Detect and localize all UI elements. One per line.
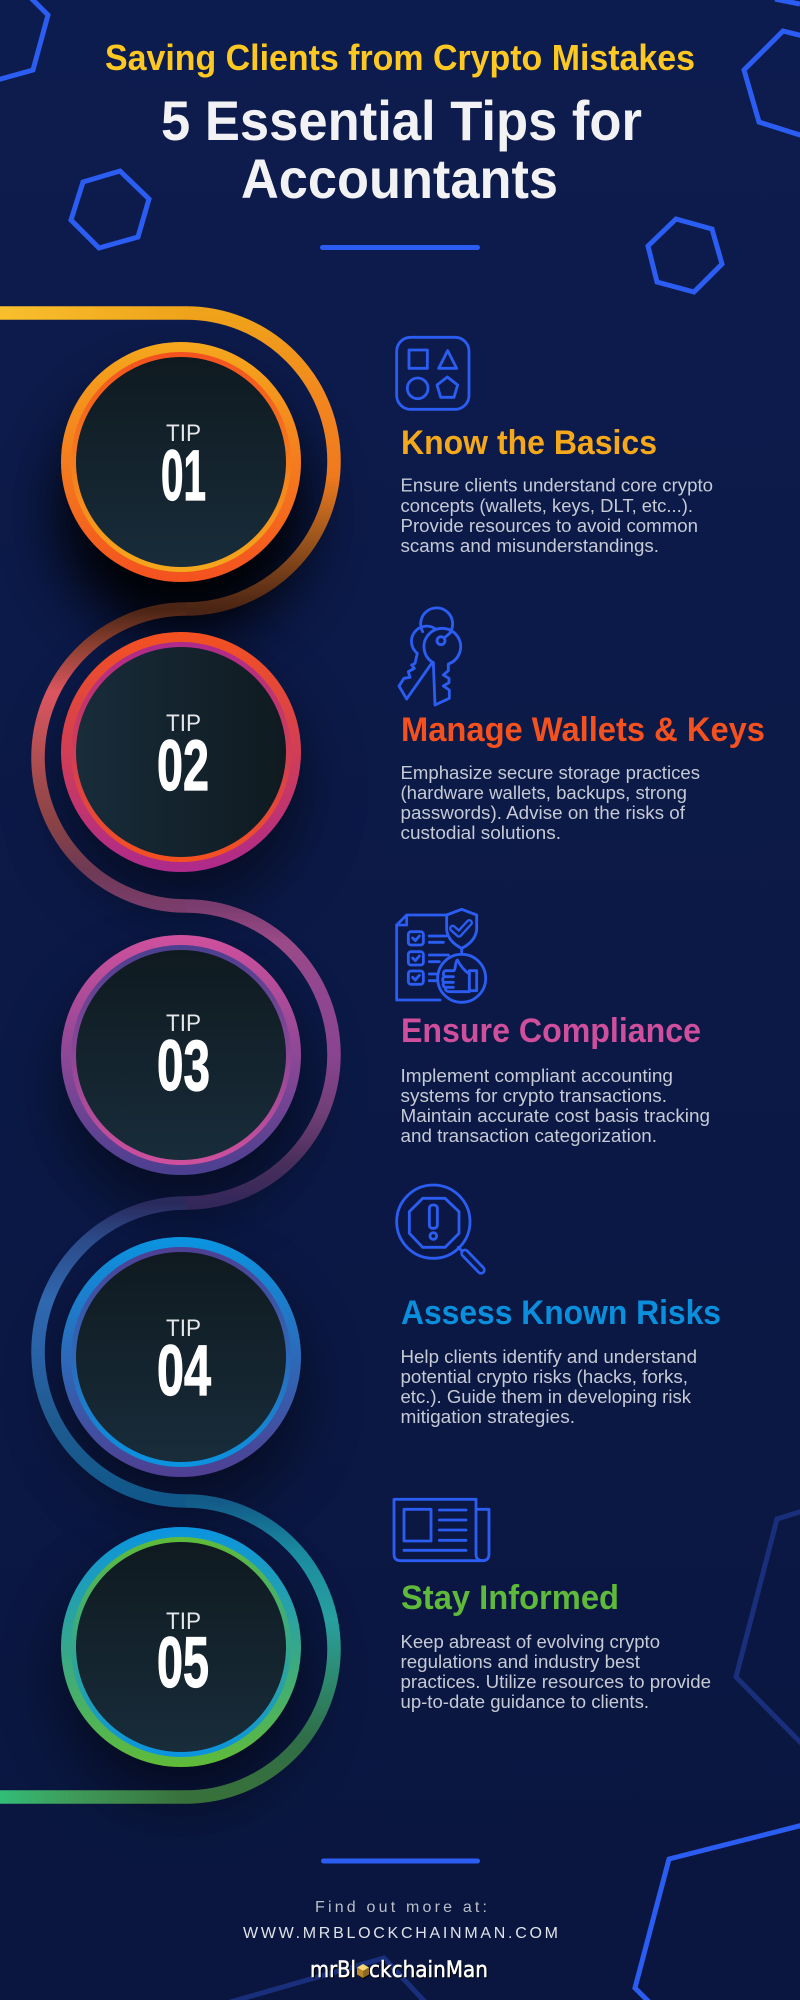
- winding gradient path: [0, 313, 334, 1797]
- icon: newspaper: [394, 1499, 489, 1561]
- text: assess known risks: potential crypto risks (hacks, forks,: [400, 1367, 688, 1387]
- header divider: [320, 245, 480, 250]
- text: know the basics: [400, 476, 713, 556]
- icon: keys: [399, 608, 461, 705]
- text: stay informed: [400, 1632, 711, 1712]
- text: manage wallets and keys: custodial solutions.: [400, 823, 561, 843]
- text: ensure compliance: systems for crypto transactions.: [400, 1086, 667, 1106]
- icon: shapes: [397, 337, 469, 409]
- text: know the basics: scams and misunderstandings.: [400, 536, 659, 556]
- tip 2 number: 02: [157, 727, 209, 806]
- text: know the basics: Provide resources to avoid common: [400, 516, 698, 536]
- tip 1 label: TIP: [166, 420, 201, 447]
- heading: ensure compliance: Ensure Compliance: [401, 1012, 701, 1050]
- text: know the basics: Ensure clients understand core crypto: [400, 476, 713, 496]
- text: manage wallets and keys: Emphasize secure storage practices: [400, 763, 700, 783]
- tip 4 badge: [61, 1237, 301, 1477]
- text: ensure compliance: Implement compliant accounting: [400, 1066, 673, 1086]
- heading: manage wallets and keys: Manage Wallets & Keys: [401, 711, 765, 749]
- tip 2 badge: [61, 632, 301, 872]
- heading: stay informed: Stay Informed: [401, 1579, 619, 1617]
- heading: know the basics: Know the Basics: [401, 424, 657, 462]
- text: manage wallets and keys: [400, 763, 700, 843]
- footer divider: [321, 1858, 480, 1864]
- text: assess known risks: etc.). Guide them in developing risk: [400, 1387, 692, 1407]
- footer url: WWW.MRBLOCKCHAINMAN.COM: [243, 1925, 558, 1942]
- icon: risk magnifier: [397, 1185, 481, 1270]
- subtitle: Saving Clients from Crypto Mistakes: [105, 37, 695, 78]
- tip 1 badge: [61, 342, 301, 582]
- text: stay informed: up-to-date guidance to clients.: [400, 1692, 649, 1712]
- tip 5 badge: [61, 1527, 301, 1767]
- main title line 1: 5 Essential Tips for: [161, 89, 642, 152]
- text: manage wallets and keys: passwords). Advise on the risks of: [400, 803, 686, 823]
- text: stay informed: practices. Utilize resources to provide: [400, 1672, 711, 1692]
- icon: compliance checklist: [397, 909, 486, 1002]
- tip 2 label: TIP: [166, 710, 201, 737]
- tip 5 label: TIP: [166, 1608, 201, 1635]
- text: manage wallets and keys: (hardware wallets, backups, strong: [400, 783, 687, 803]
- tip 1 number: 01: [161, 437, 206, 516]
- header title block: [105, 37, 695, 210]
- text: know the basics: concepts (wallets, keys, DLT, etc...).: [400, 496, 693, 516]
- heading: assess known risks: Assess Known Risks: [401, 1294, 721, 1332]
- tip 3 label: TIP: [166, 1010, 201, 1037]
- circle shadows: [58, 387, 308, 1802]
- text: ensure compliance: [400, 1066, 710, 1146]
- footer call to action: Find out more at:: [315, 1899, 487, 1916]
- tip 3 badge: [61, 935, 301, 1175]
- text: ensure compliance: and transaction categorization.: [400, 1126, 657, 1146]
- text: ensure compliance: Maintain accurate cost basis tracking: [400, 1106, 710, 1126]
- tip 4 number: 04: [157, 1332, 211, 1411]
- text: assess known risks: mitigation strategies.: [400, 1407, 575, 1427]
- footer logo: [310, 1958, 488, 1983]
- text: assess known risks: Help clients identify and understand: [400, 1347, 697, 1367]
- text: assess known risks: [400, 1347, 697, 1427]
- text: stay informed: regulations and industry best: [400, 1652, 640, 1672]
- footer logo: ckchainMan: [369, 1958, 488, 1983]
- main title line 2: Accountants: [241, 147, 558, 210]
- text: stay informed: Keep abreast of evolving crypto: [400, 1632, 660, 1652]
- tip 3 number: 03: [157, 1027, 210, 1106]
- tip 4 label: TIP: [166, 1315, 201, 1342]
- icon: gold cube: [357, 1964, 369, 1978]
- tip 5 number: 05: [157, 1624, 209, 1703]
- footer logo: mrBl: [310, 1958, 356, 1983]
